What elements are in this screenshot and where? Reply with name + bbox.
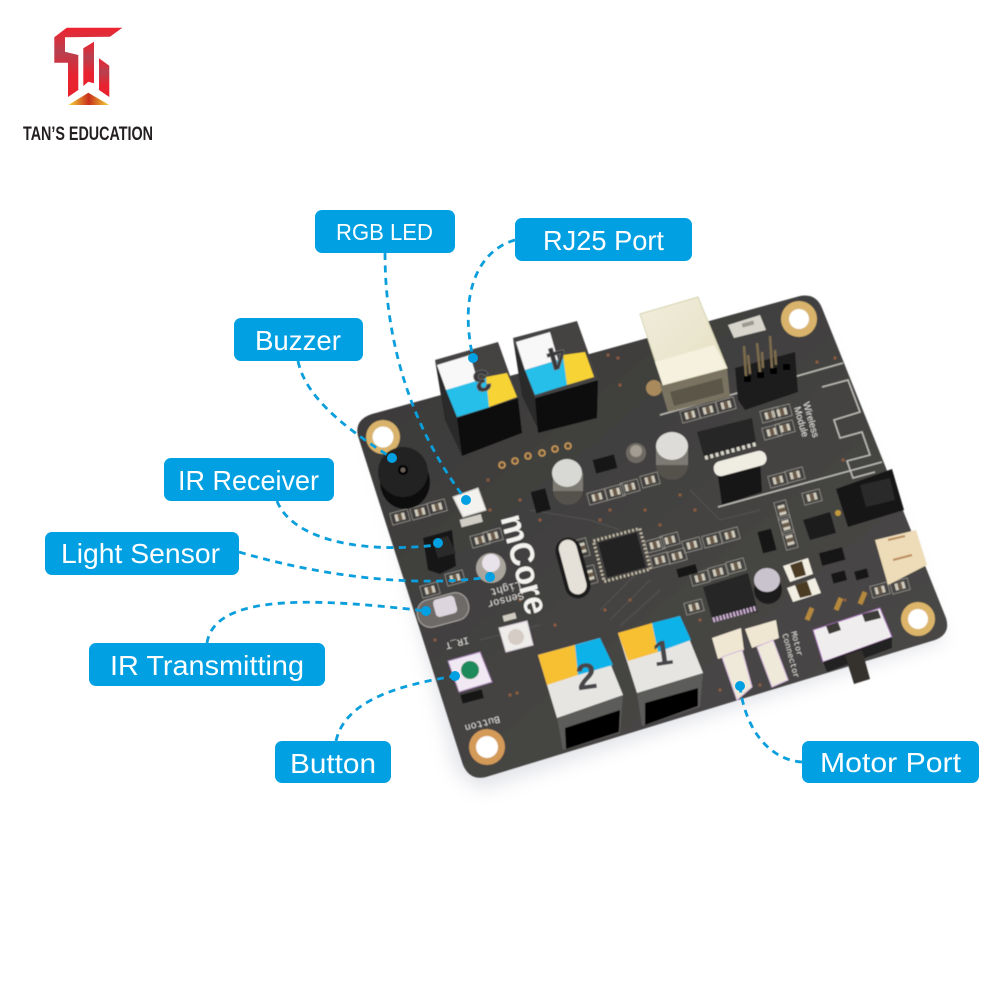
callout: RJ25 Port <box>468 218 692 363</box>
callout: RGB LED: RGB LED <box>336 219 433 245</box>
callout: Motor Port: Motor Port <box>820 747 961 778</box>
8-pin chip and oscillator socket <box>697 418 768 505</box>
crystal oscillator <box>552 535 594 601</box>
battery connector <box>875 530 927 585</box>
DC power jack <box>835 469 904 527</box>
RJ25 port 2 <box>538 638 623 750</box>
callout: Buzzer <box>234 318 397 463</box>
inductors <box>783 558 821 602</box>
capacitors <box>552 432 688 505</box>
motor connector label: Motor <box>788 630 804 657</box>
light sensor label: Sensor <box>485 588 525 610</box>
logo mark <box>54 28 122 105</box>
motor connector M2 <box>745 620 788 687</box>
main microcontroller chip <box>593 529 651 581</box>
callout: Button <box>275 671 460 783</box>
small transistors <box>531 454 869 584</box>
light sensor label <box>483 578 525 610</box>
callout: RJ25 Port: RJ25 Port <box>543 225 664 256</box>
board shadow <box>370 310 945 790</box>
buzzer <box>378 447 430 509</box>
callout: Light Sensor <box>45 532 495 582</box>
number 4: 4 <box>543 338 571 378</box>
board outline <box>357 296 947 778</box>
callout: Light Sensor: Light Sensor <box>61 538 220 569</box>
pin header <box>735 336 798 410</box>
wireless module label <box>791 401 821 442</box>
photo: mCore circuit board <box>357 296 947 790</box>
push button <box>448 652 492 704</box>
callout: RGB LED <box>315 210 471 505</box>
mCore logotype: mCore <box>493 510 556 618</box>
callout: IR Receiver: IR Receiver <box>178 465 319 496</box>
number 2: 2 <box>573 655 600 698</box>
RJ25 port 3 <box>435 342 522 456</box>
callout: Button: Button <box>290 748 376 779</box>
wireless module label: Wireless <box>800 401 821 439</box>
mounting holes <box>366 301 935 765</box>
RJ25 port 4 <box>513 321 598 433</box>
light sensor LED <box>476 553 506 583</box>
motor connector label: Connector <box>779 633 801 679</box>
driver chip <box>703 573 758 620</box>
number 3: 3 <box>469 362 495 398</box>
RJ25 port 1 <box>618 616 703 726</box>
power slide switch <box>807 592 892 684</box>
callout: IR Transmitting: IR Transmitting <box>110 650 304 681</box>
RGB LED top <box>453 488 486 527</box>
USB port <box>640 297 730 412</box>
RGB LED bottom <box>499 613 533 652</box>
callout: Motor Port <box>735 681 979 783</box>
wireless module outline and antenna <box>660 363 882 507</box>
motor connector M1 <box>712 628 752 700</box>
wireless module label: Module <box>791 405 810 438</box>
logo wordmark: TAN’S EDUCATION <box>23 124 153 145</box>
IR receiver <box>423 530 456 574</box>
callout: Buzzer: Buzzer <box>255 325 341 356</box>
small capacitor <box>754 568 782 604</box>
button label: Button <box>463 712 501 732</box>
callout: IR Receiver <box>164 458 443 548</box>
vias and traces <box>403 353 887 697</box>
SOIC chip <box>803 512 836 540</box>
top small switch <box>728 315 766 338</box>
logo: Tan's Education <box>23 28 153 145</box>
motor connector label <box>779 630 810 679</box>
callout: IR Transmitting <box>89 602 431 686</box>
header pads <box>499 443 571 468</box>
number 1: 1 <box>650 633 675 674</box>
light sensor label: Light <box>489 578 522 597</box>
IR_T label: IR_T <box>444 633 470 650</box>
IR transmitter LED <box>414 590 472 630</box>
surface-mount components <box>390 397 910 615</box>
